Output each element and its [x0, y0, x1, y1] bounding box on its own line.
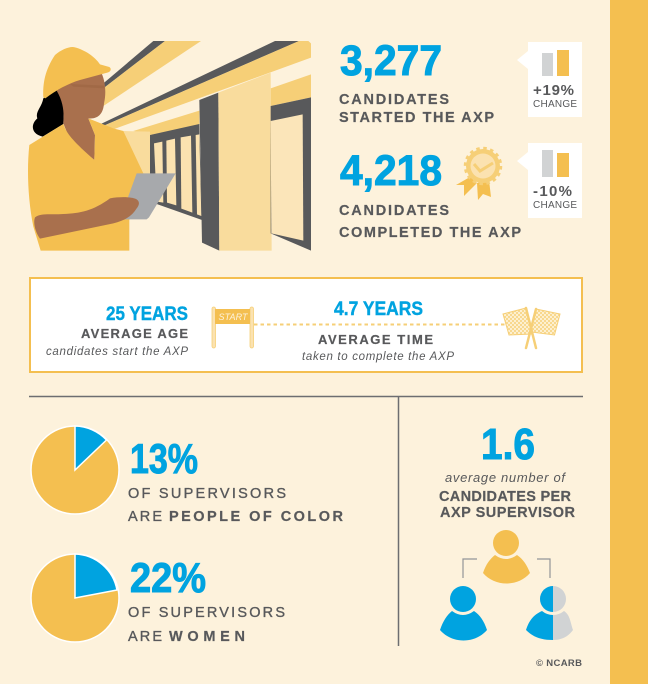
stat: candidates per supervisor: AXP SUPERVISOR	[440, 505, 576, 521]
stat: 13% supervisors people of color: ARE	[128, 509, 162, 525]
label: candidates completed the AXP: CANDIDATES	[339, 203, 449, 219]
sidebar stripe	[610, 0, 648, 684]
stat: 13% supervisors people of color: PEOPLE OF COLOR	[169, 509, 344, 525]
label: candidates completed the AXP: COMPLETED THE AXP	[339, 225, 521, 241]
icon: start banner	[212, 307, 254, 348]
stat: 13% supervisors people of color: OF SUPERVISORS	[128, 486, 286, 502]
icon: supervisor and candidates diagram	[440, 530, 573, 640]
age stat	[46, 303, 188, 358]
number 3,277: 3,277	[340, 37, 442, 85]
label: candidates started the AXP: STARTED THE AXP	[339, 110, 494, 126]
change callout: -10%: -10%	[533, 183, 572, 200]
copyright: © NCARB	[536, 658, 582, 669]
connector brackets	[463, 559, 550, 578]
stat: 22% supervisors women	[128, 554, 285, 645]
pie chart: 22%	[31, 554, 119, 642]
stat: 13% supervisors people of color	[128, 435, 344, 525]
stat: 13% supervisors people of color: 13%	[130, 435, 198, 482]
duration stat	[302, 298, 454, 363]
duration stat: 4.7 YEARS	[334, 298, 423, 320]
icon: checkered flags	[503, 308, 560, 348]
change callout: +19%: CHANGE	[533, 99, 577, 110]
stat: 22% supervisors women: WOMEN	[169, 629, 245, 645]
stat: candidates per supervisor: average number of	[445, 470, 566, 485]
person: partial candidate	[526, 586, 573, 640]
age stat: candidates start the AXP	[46, 346, 188, 358]
number 4,218: 4,218	[340, 147, 442, 195]
age stat: 25 YEARS	[106, 303, 188, 325]
stat: 22% supervisors women: OF SUPERVISORS	[128, 605, 285, 621]
change callout: -10%: CHANGE	[533, 200, 577, 211]
pie chart: 13%	[31, 426, 119, 514]
stat: candidates per supervisor: CANDIDATES PER	[439, 489, 572, 505]
icon: start banner: START	[218, 312, 249, 322]
duration stat: AVERAGE TIME	[318, 332, 433, 347]
change callout: -10%	[517, 143, 582, 218]
woman figure	[28, 47, 176, 251]
section divider lines	[29, 396, 583, 646]
change callout: +19%	[517, 42, 582, 117]
age stat: AVERAGE AGE	[81, 326, 188, 341]
person: supervisor	[483, 530, 530, 584]
stat: candidates started	[339, 37, 494, 126]
duration stat: taken to complete the AXP	[302, 351, 454, 363]
illustration: architect with tablet at building site	[28, 41, 311, 251]
stat: candidates completed	[339, 147, 521, 241]
building structure	[100, 41, 311, 251]
stat: 22% supervisors women: 22%	[130, 554, 206, 601]
icon: award ribbon badge	[456, 148, 500, 200]
panel: timeline	[30, 278, 582, 372]
stat: candidates per supervisor	[439, 420, 576, 521]
stat: candidates per supervisor: 1.6	[481, 420, 535, 469]
stat: 22% supervisors women: ARE	[128, 629, 162, 645]
label: candidates started the AXP: CANDIDATES	[339, 92, 449, 108]
change callout: +19%: +19%	[533, 82, 574, 99]
person: candidate	[440, 586, 487, 640]
dashed progress line	[254, 324, 506, 326]
